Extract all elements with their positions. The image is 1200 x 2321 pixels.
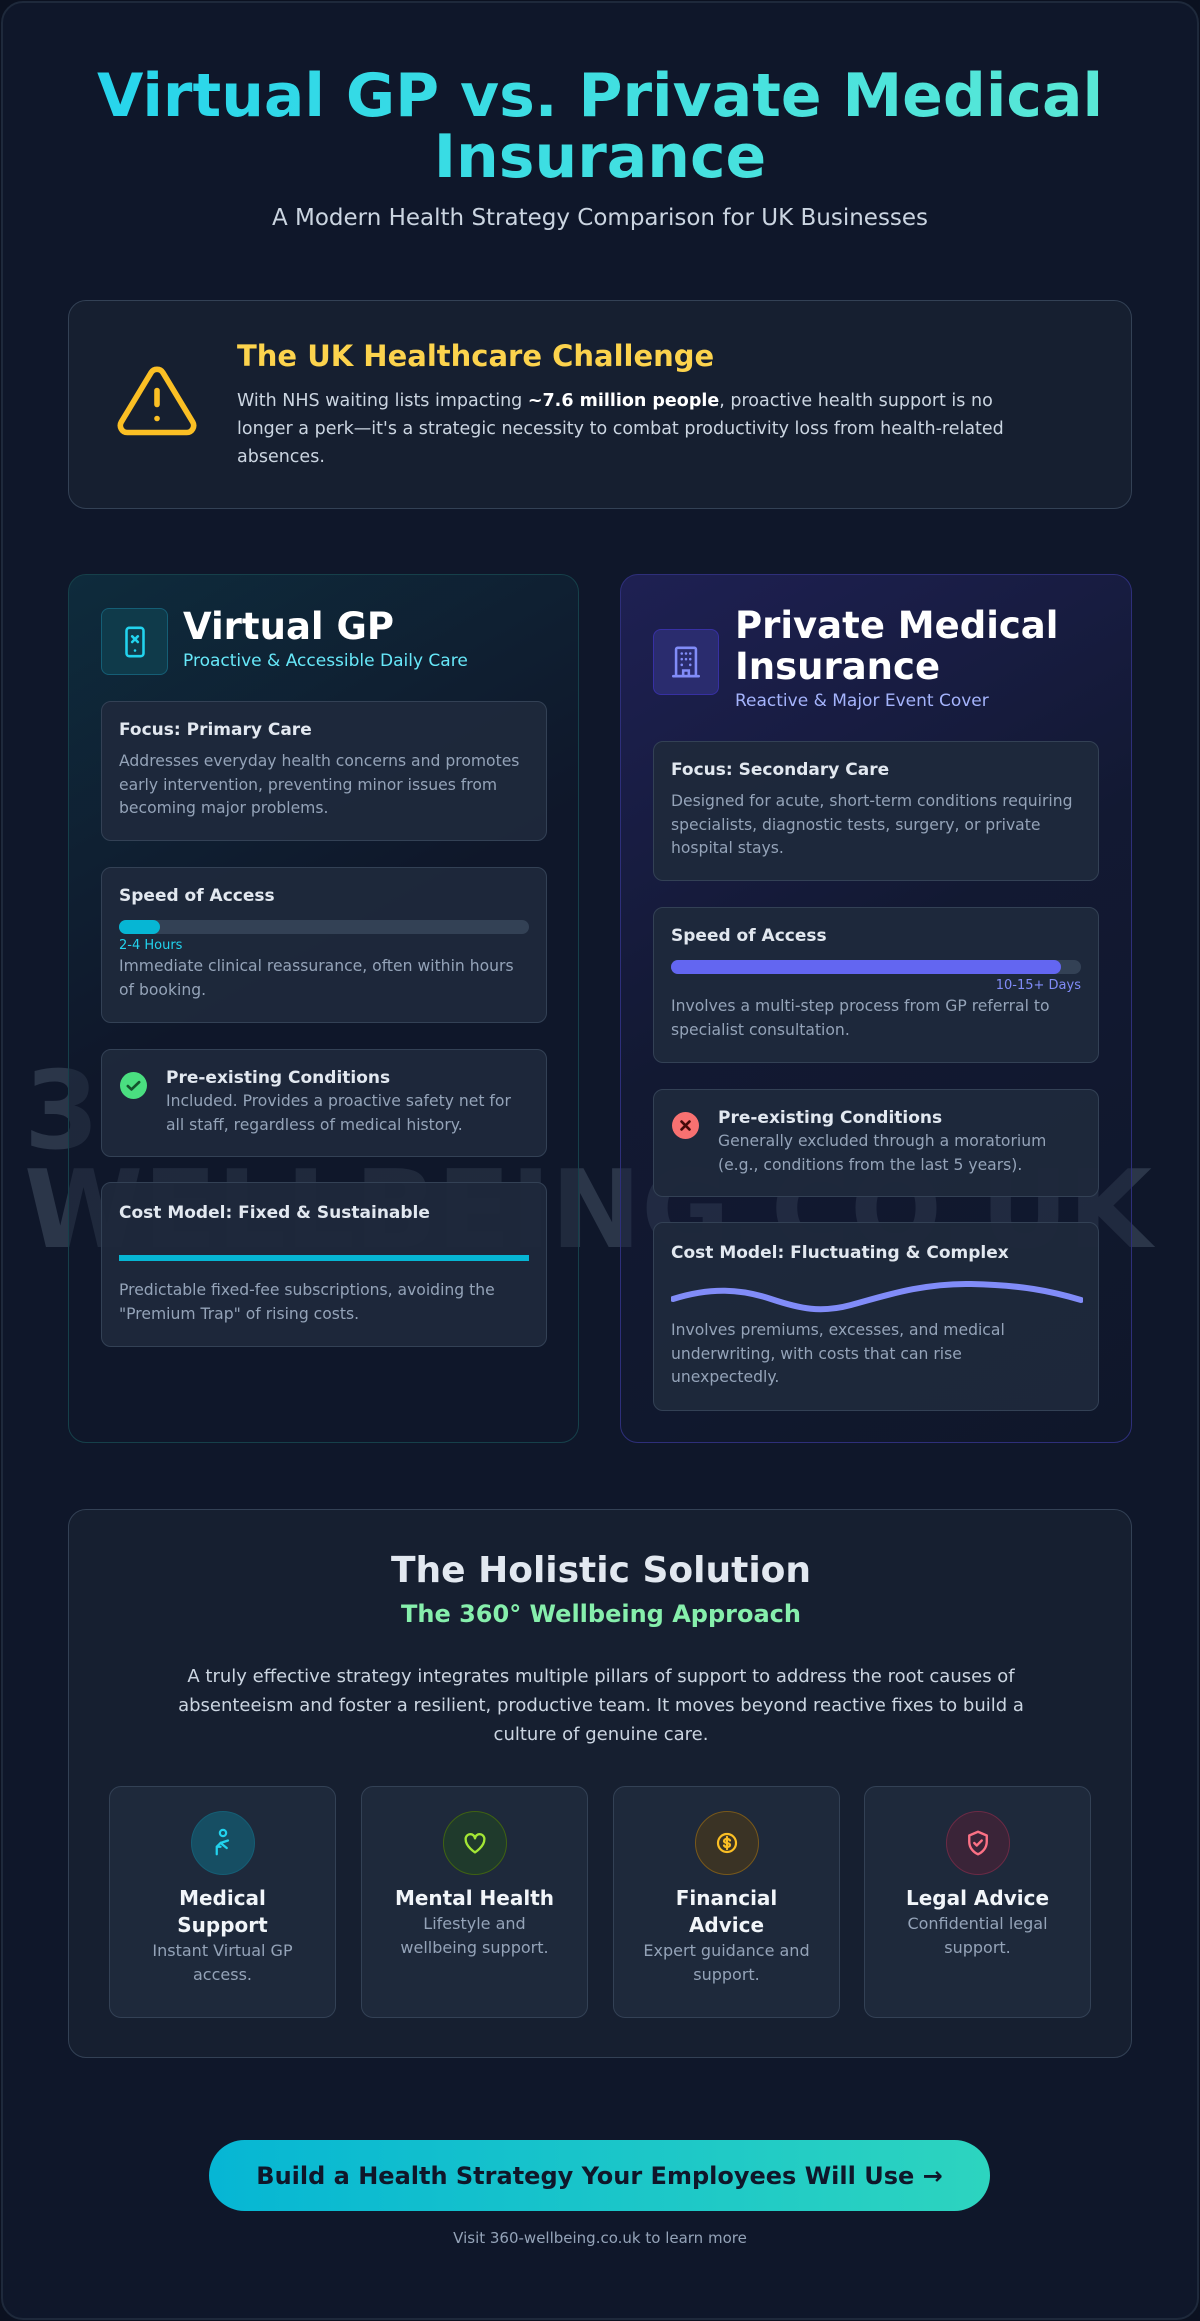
pillar: medical support [109,1786,336,2018]
watermark: WELLBEING.CO.UK [24,1148,1152,1273]
heading: challenge: The UK Healthcare Challenge [237,339,714,373]
subheading: Reactive & Major Event Cover [735,691,989,711]
text: challenge body: With NHS waiting lists impacting ~7.6 million people, proactive health support is no longer a perk—it's a strategic necessity to combat productivity loss from health-related absences. [237,391,1004,467]
panel: Virtual GP [68,574,579,1443]
card: speed of access: Involves a multi-step process from GP referral to specialist consultation. [671,997,1050,1038]
line: fixed cost [119,1255,529,1261]
card: speed of access: Speed of Access [671,926,827,946]
icon: shield [946,1811,1010,1875]
bar chart: speed [671,960,1081,974]
card: focus secondary [653,741,1099,881]
card: focus secondary: Designed for acute, short-term conditions requiring specialists, diagnostic tests, surgery, or private hospital stays. [671,792,1072,857]
card: cost fixed: Predictable fixed-fee subscriptions, avoiding the "Premium Trap" of rising costs. [119,1281,495,1322]
button: call to action: Build a Health Strategy Your Employees Will Use → [256,2162,943,2190]
pillar: medical support: Medical Support [177,1886,268,1937]
card: focus primary: Focus: Primary Care [119,720,312,740]
card: pre-existing included: Included. Provides a proactive safety net for all staff, regardless of medical history. [166,1092,511,1134]
pillar: legal advice: Confidential legal support. [907,1914,1048,1957]
watermark: 3 [24,1049,99,1174]
pillar: financial advice: Financial Advice [676,1886,777,1937]
card: focus primary: Addresses everyday health concerns and promotes early intervention, preventing minor issues from becoming major problems. [119,752,519,817]
pillar: financial advice: Expert guidance and support. [643,1941,810,1984]
card: focus primary [101,701,547,841]
heading: PMI: Insurance [735,645,940,688]
card: cost fixed: Cost Model: Fixed & Sustainable [119,1203,430,1223]
icon: check [120,1072,147,1099]
icon: cross [672,1112,699,1139]
card: pre-existing included [101,1049,547,1157]
bar chart: speed [119,920,529,934]
pillar: legal advice: Legal Advice [906,1886,1049,1910]
icon: building [653,629,719,695]
title: Insurance [434,122,766,192]
card: cost fluctuating: Cost Model: Fluctuating & Complex [671,1243,1009,1263]
pillar: mental health [361,1786,588,2018]
card: speed of access: Immediate clinical reassurance, often within hours of booking. [119,957,514,998]
subheading: 360: The 360° Wellbeing Approach [401,1600,801,1628]
title: Virtual GP vs. Private Medical [97,61,1103,131]
icon: warning [118,366,196,436]
pillar: financial advice [613,1786,840,2018]
pillar: legal advice [864,1786,1091,2018]
heading: Virtual GP: Virtual GP [183,605,394,648]
icon: medical [190,1811,254,1875]
line: wavy cost [671,1281,1083,1312]
footer text: Visit 360-wellbeing.co.uk to learn more [453,2229,747,2247]
heading: PMI [735,604,1058,688]
card: pre-existing excluded: Generally excluded through a moratorium (e.g., conditions from the last 5 years). [718,1132,1046,1174]
button: call to action [209,2140,990,2211]
subtitle: A Modern Health Strategy Comparison for UK Businesses [272,205,928,231]
card: speed of access: 10-15+ Days [996,978,1081,993]
card: speed of access: 2-4 Hours [119,938,182,953]
panel: UK healthcare challenge [68,300,1132,509]
icon: phone [101,608,168,675]
title [0,66,1200,188]
icon: coin [694,1811,758,1875]
card: focus secondary: Focus: Secondary Care [671,760,889,780]
card: pre-existing included: Pre-existing Conditions [166,1068,390,1088]
card: pre-existing excluded [653,1089,1099,1197]
pillar: medical support: Instant Virtual GP access. [152,1941,293,1984]
watermark [24,1049,1155,1273]
card: speed of access: Speed of Access [119,886,275,906]
icon: heart [442,1811,506,1875]
card: speed of access [101,867,547,1023]
pillar: mental health: Mental Health [395,1886,554,1910]
heading: PMI: Private Medical [735,604,1058,647]
card: cost fluctuating [653,1222,1099,1411]
panel: Private Medical Insurance [620,574,1132,1443]
card: speed of access [653,907,1099,1063]
heading: holistic: The Holistic Solution [391,1550,811,1591]
pillar: mental health: Lifestyle and wellbeing support. [400,1914,549,1957]
subheading: Proactive & Accessible Daily Care [183,651,468,671]
card: pre-existing excluded: Pre-existing Conditions [718,1108,942,1128]
panel: holistic solution [68,1509,1132,2058]
card: cost fluctuating: Involves premiums, excesses, and medical underwriting, with costs that can rise unexpectedly. [671,1321,1005,1386]
card: cost fixed [101,1182,547,1347]
text: holistic body: A truly effective strategy integrates multiple pillars of support to address the root causes of absenteeism and foster a resilient, productive team. It moves beyond reactive fixes to build a culture of genuine care. [178,1666,1024,1745]
